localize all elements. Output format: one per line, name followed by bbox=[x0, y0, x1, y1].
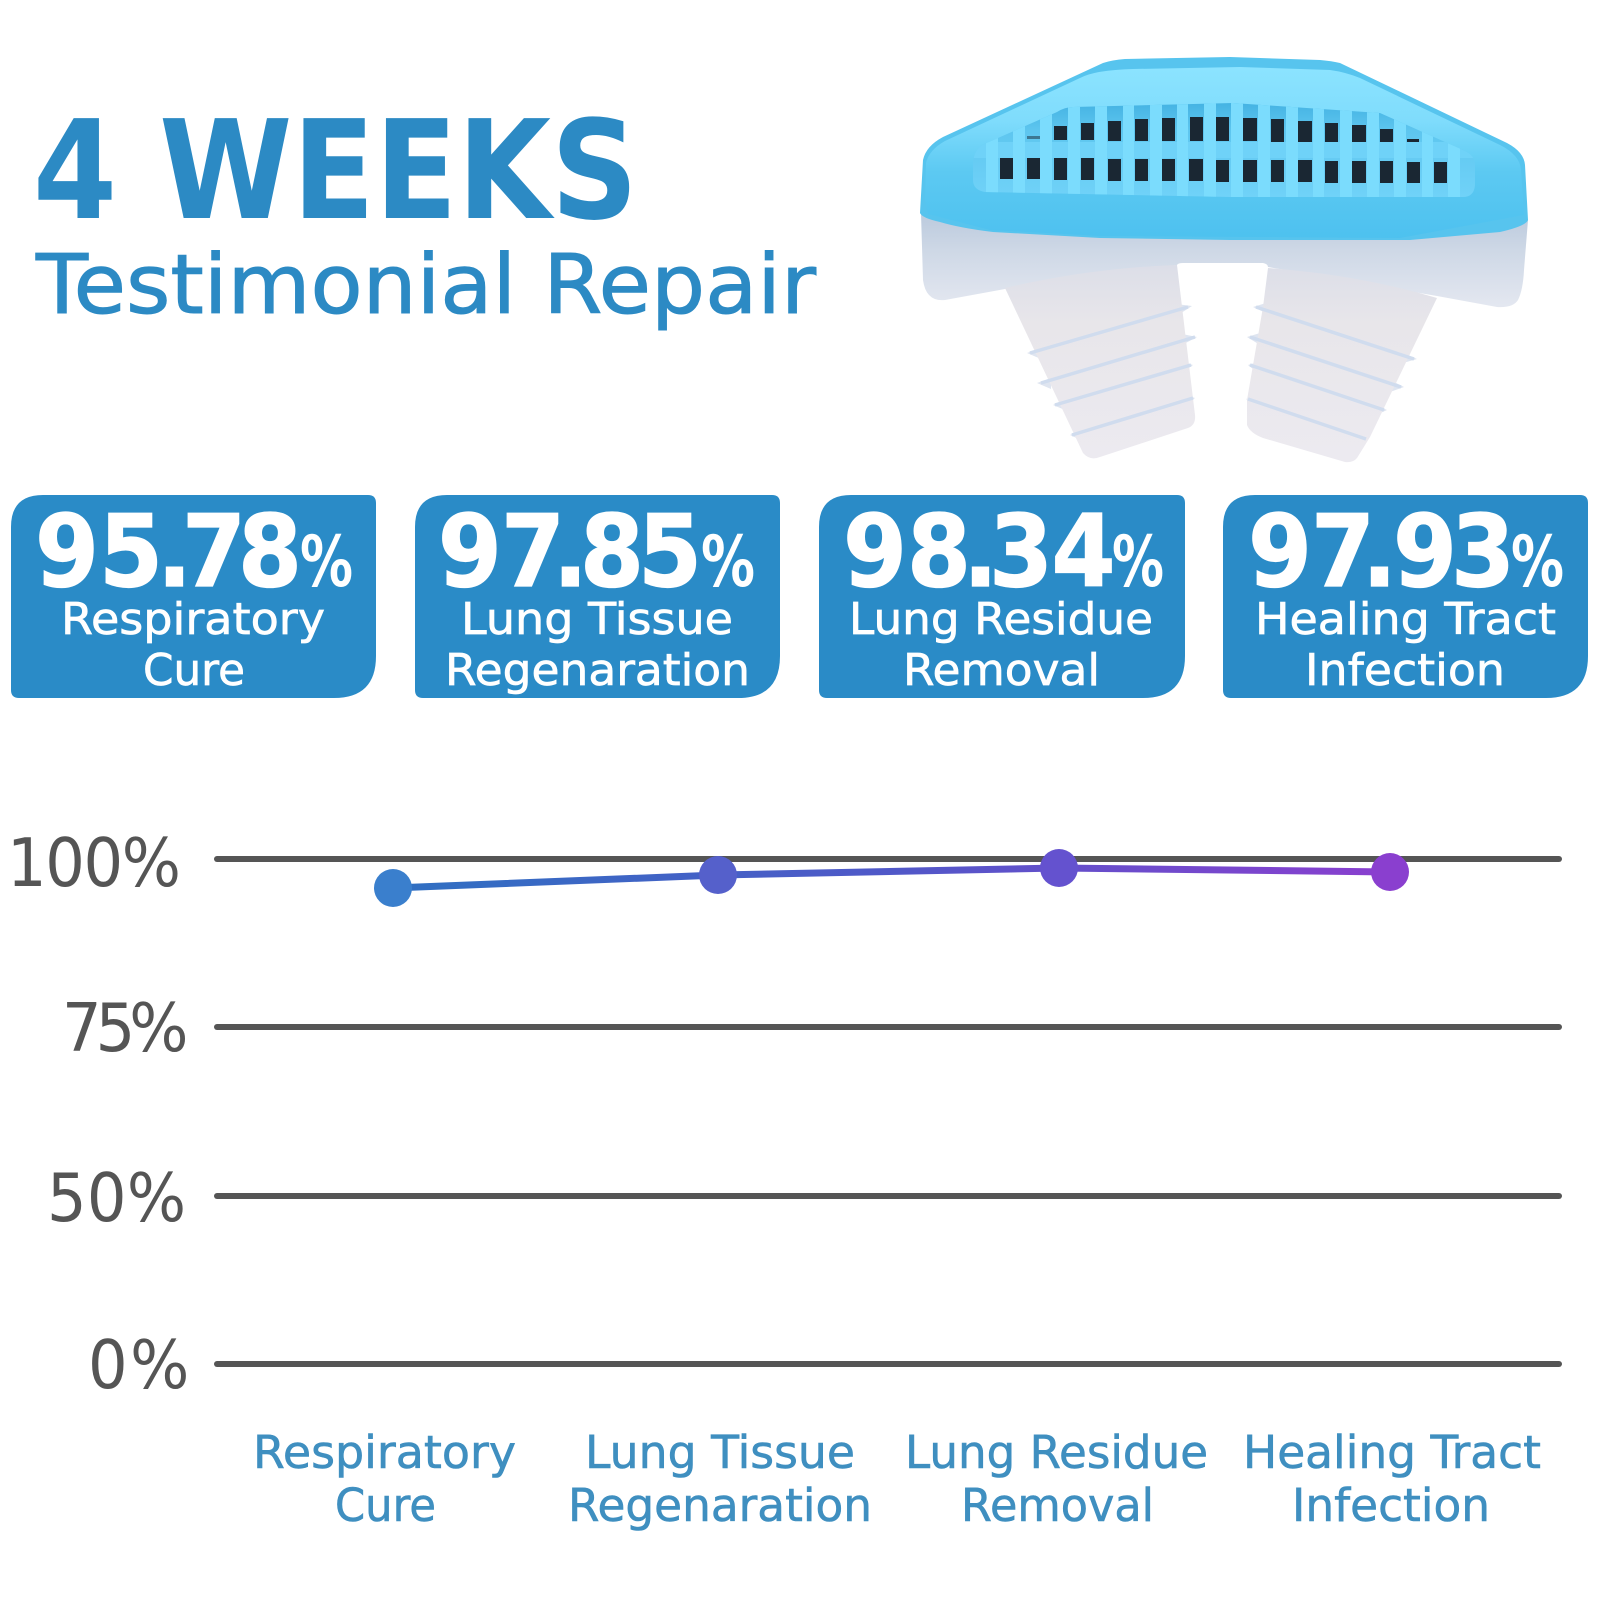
stat card: Lung Residue Removal: % bbox=[1112, 521, 1164, 603]
x axis labels: Lung Residue bbox=[905, 1426, 1208, 1479]
x axis labels: Lung Tissue bbox=[585, 1426, 855, 1479]
stat card: Lung Residue Removal: 98.34 bbox=[843, 493, 1116, 610]
right silicone nozzle bbox=[1246, 268, 1437, 462]
title: 4 WEEKS: 4 WEEKS bbox=[33, 92, 638, 251]
x axis labels: Healing Tract bbox=[1243, 1426, 1541, 1479]
x axis labels: Cure bbox=[335, 1479, 436, 1532]
stat card: Healing Tract Infection: Infection bbox=[1305, 645, 1505, 696]
filter slots bbox=[1000, 117, 1447, 183]
stat card: Respiratory Cure: 95.78 bbox=[35, 493, 302, 610]
stat card: Lung Tissue Regenaration: Regenaration bbox=[445, 645, 750, 696]
stat card: Healing Tract Infection bbox=[1223, 493, 1588, 698]
y axis labels bbox=[7, 825, 189, 1405]
stat card: Respiratory Cure: % bbox=[300, 521, 353, 603]
x axis labels: Infection bbox=[1292, 1479, 1490, 1532]
subtitle: Testimonial Repair: Testimonial Repair bbox=[35, 238, 816, 333]
line chart bbox=[7, 825, 1559, 1532]
stat card: Respiratory Cure: Cure bbox=[143, 645, 245, 696]
stat card: Lung Tissue Regenaration: Lung Tissue bbox=[461, 594, 733, 645]
x axis labels: Respiratory bbox=[253, 1426, 516, 1479]
y axis labels: 0% bbox=[88, 1327, 189, 1405]
vent crossbar bbox=[965, 142, 1485, 158]
stat card: Respiratory Cure bbox=[11, 493, 376, 698]
stat card: Healing Tract Infection: % bbox=[1511, 521, 1564, 603]
stat card: Lung Residue Removal: Removal bbox=[903, 645, 1100, 696]
silicone base bbox=[921, 213, 1528, 307]
data points bbox=[374, 849, 1409, 907]
y axis labels: 100% bbox=[7, 825, 181, 903]
vent bars bbox=[986, 100, 1460, 200]
stat card: Lung Tissue Regenaration: 97.85 bbox=[438, 493, 702, 610]
data line bbox=[393, 868, 1390, 888]
stat card: Healing Tract Infection: 97.93 bbox=[1248, 493, 1515, 610]
left silicone nozzle bbox=[1005, 265, 1197, 458]
y axis labels: 50% bbox=[47, 1160, 186, 1238]
vent window bbox=[965, 100, 1485, 200]
stat card: Healing Tract Infection: Healing Tract bbox=[1255, 594, 1556, 645]
stat card: Lung Tissue Regenaration: % bbox=[701, 521, 755, 603]
stat card: Lung Residue Removal bbox=[819, 493, 1185, 698]
y axis labels: 75% bbox=[62, 990, 188, 1068]
x axis labels: Removal bbox=[961, 1479, 1154, 1532]
stat card: Lung Tissue Regenaration bbox=[415, 493, 780, 698]
x axis labels: Regenaration bbox=[568, 1479, 872, 1532]
shell upper face bbox=[925, 67, 1524, 238]
product image: blue anti-snore nose device bbox=[920, 57, 1528, 462]
blue shell bbox=[920, 57, 1528, 240]
x axis labels bbox=[253, 1426, 1541, 1532]
stat card: Respiratory Cure: Respiratory bbox=[61, 594, 325, 645]
stat card: Lung Residue Removal: Lung Residue bbox=[849, 594, 1153, 645]
